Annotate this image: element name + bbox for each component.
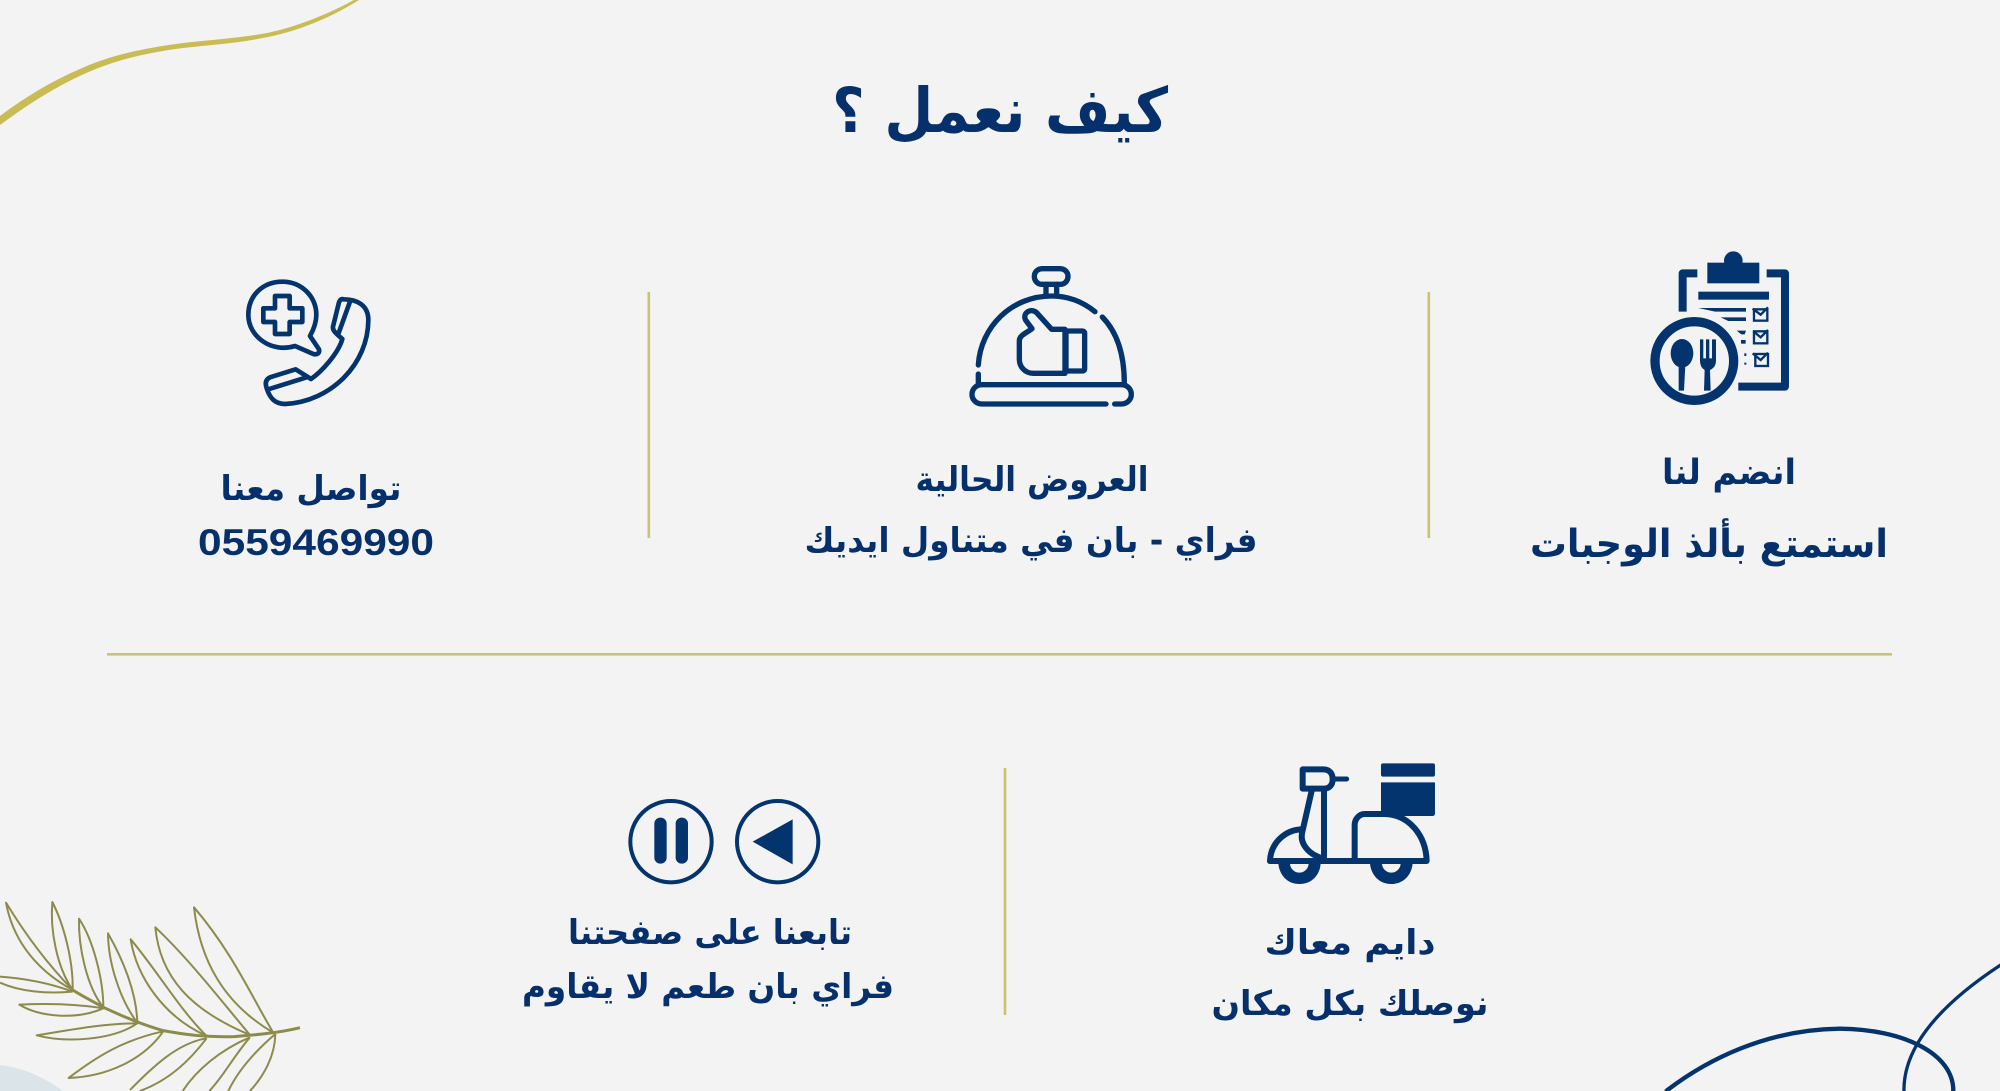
decorative leaf branch (0, 902, 300, 1091)
decorative light blue circle (0, 1065, 63, 1091)
panel: contact us (198, 282, 434, 563)
text: join us: انضم لنا (1662, 453, 1796, 493)
horizontal divider (107, 653, 1892, 656)
text: contact us: تواصل معنا (220, 469, 402, 509)
vertical divider left (648, 292, 650, 538)
panel: current offers (804, 269, 1258, 561)
icon: back button (737, 801, 818, 882)
text: contact us (198, 469, 434, 563)
panel: always with you (1212, 763, 1488, 1024)
decorative gold curve (0, 0, 359, 125)
text: follow our page (522, 913, 894, 1007)
icon: serving dome with thumbs up (972, 269, 1131, 404)
text: contact us: 0559469990 (198, 522, 434, 563)
text: current offers (804, 460, 1258, 561)
icon: pause button (630, 801, 712, 882)
text: join us (1530, 453, 1888, 567)
text: current offers: فراي - بان في متناول ايديك (804, 521, 1258, 561)
icon: clipboard with plate (1655, 251, 1785, 400)
text: follow our page: فراي بان طعم لا يقاوم (522, 967, 894, 1007)
vertical divider right (1428, 292, 1430, 538)
text: join us: استمتع بألذ الوجبات (1530, 518, 1888, 567)
panel: join us (1530, 251, 1888, 567)
text: follow our page: تابعنا على صفحتنا (568, 913, 852, 953)
text: always with you (1212, 923, 1488, 1024)
icon: phone with medical speech bubble (248, 282, 368, 404)
text: always with you: نوصلك بكل مكان (1212, 984, 1488, 1024)
title: كيف نعمل ؟ (832, 74, 1169, 147)
text: current offers: العروض الحالية (916, 460, 1148, 500)
icon: delivery scooter (1270, 763, 1435, 884)
text: always with you: دايم معاك (1264, 923, 1436, 963)
panel: follow our page (522, 801, 894, 1007)
vertical divider bottom (1004, 768, 1006, 1015)
decorative blue curves (1667, 965, 2000, 1091)
